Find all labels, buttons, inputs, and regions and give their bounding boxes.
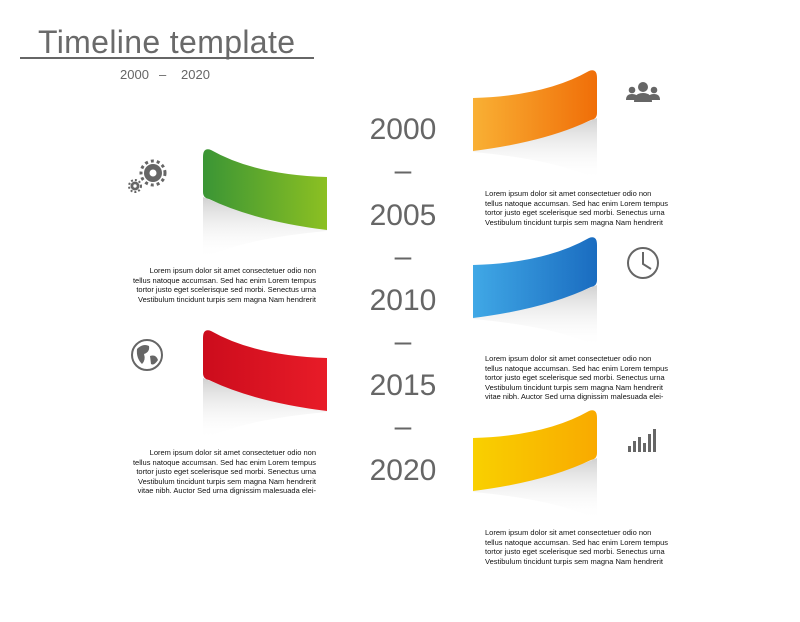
years column: 2005 bbox=[370, 199, 436, 232]
subtitle: 2020 bbox=[181, 67, 210, 82]
text: blue: Lorem ipsum dolor sit amet consectetuer odio non bbox=[485, 354, 651, 363]
subtitle: 2000 bbox=[120, 67, 149, 82]
years column: 2000 bbox=[370, 113, 436, 146]
years column: 2020 bbox=[370, 454, 436, 487]
icon: people bbox=[626, 82, 660, 102]
ribbon: blue bbox=[473, 237, 597, 347]
text: blue: tortor justo eget scelerisque sed morbi. Senectus urna bbox=[485, 373, 665, 382]
text: red: tortor justo eget scelerisque sed morbi. Senectus urna bbox=[136, 467, 316, 476]
ribbon: red bbox=[203, 330, 327, 440]
text: blue: tellus natoque accumsan. Sed hac enim Lorem tempus bbox=[485, 364, 668, 373]
icon: globe bbox=[132, 340, 162, 370]
text: red: Lorem ipsum dolor sit amet consectetuer odio non bbox=[150, 448, 316, 457]
text: orange bbox=[485, 189, 668, 227]
text: blue bbox=[485, 354, 668, 401]
icon: bar chart bbox=[628, 429, 656, 452]
title: Timeline template bbox=[38, 24, 295, 60]
text: yellow: tellus natoque accumsan. Sed hac enim Lorem tempus bbox=[485, 538, 668, 547]
text: yellow: tortor justo eget scelerisque sed morbi. Senectus urna bbox=[485, 547, 665, 556]
text: blue: vitae nibh. Auctor Sed urna dignissim malesuada elei- bbox=[485, 392, 663, 401]
years column bbox=[370, 113, 436, 487]
text: green: Lorem ipsum dolor sit amet consectetuer odio non bbox=[150, 266, 316, 275]
subtitle: – bbox=[159, 67, 167, 82]
ribbon: yellow bbox=[473, 410, 597, 520]
years column: 2010 bbox=[370, 284, 436, 317]
text: green bbox=[133, 266, 316, 304]
years column: – bbox=[395, 325, 412, 358]
ribbon: orange bbox=[473, 70, 597, 180]
subtitle bbox=[120, 67, 210, 82]
text: yellow: Vestibulum tincidunt turpis sem magna Nam hendrerit bbox=[485, 557, 663, 566]
icon: clock bbox=[628, 248, 658, 278]
years column: – bbox=[395, 240, 412, 273]
text: blue: Vestibulum tincidunt turpis sem magna Nam hendrerit bbox=[485, 383, 663, 392]
text: red: tellus natoque accumsan. Sed hac enim Lorem tempus bbox=[133, 458, 316, 467]
ribbon: green bbox=[203, 149, 327, 259]
text: orange: Vestibulum tincidunt turpis sem magna Nam hendrerit bbox=[485, 218, 663, 227]
text: red: vitae nibh. Auctor Sed urna dignissim malesuada elei- bbox=[138, 486, 316, 495]
text: green: Vestibulum tincidunt turpis sem magna Nam hendrerit bbox=[138, 295, 316, 304]
text: red: Vestibulum tincidunt turpis sem magna Nam hendrerit bbox=[138, 477, 316, 486]
text: orange: Lorem ipsum dolor sit amet consectetuer odio non bbox=[485, 189, 651, 198]
text: green: tellus natoque accumsan. Sed hac enim Lorem tempus bbox=[133, 276, 316, 285]
years column: – bbox=[395, 154, 412, 187]
text: green: tortor justo eget scelerisque sed morbi. Senectus urna bbox=[136, 285, 316, 294]
text: red bbox=[133, 448, 316, 495]
text: orange: tellus natoque accumsan. Sed hac enim Lorem tempus bbox=[485, 199, 668, 208]
icon: gears bbox=[129, 161, 165, 192]
years column: 2015 bbox=[370, 369, 436, 402]
text: yellow: Lorem ipsum dolor sit amet consectetuer odio non bbox=[485, 528, 651, 537]
text: yellow bbox=[485, 528, 668, 566]
text: orange: tortor justo eget scelerisque sed morbi. Senectus urna bbox=[485, 208, 665, 217]
years column: – bbox=[395, 410, 412, 443]
